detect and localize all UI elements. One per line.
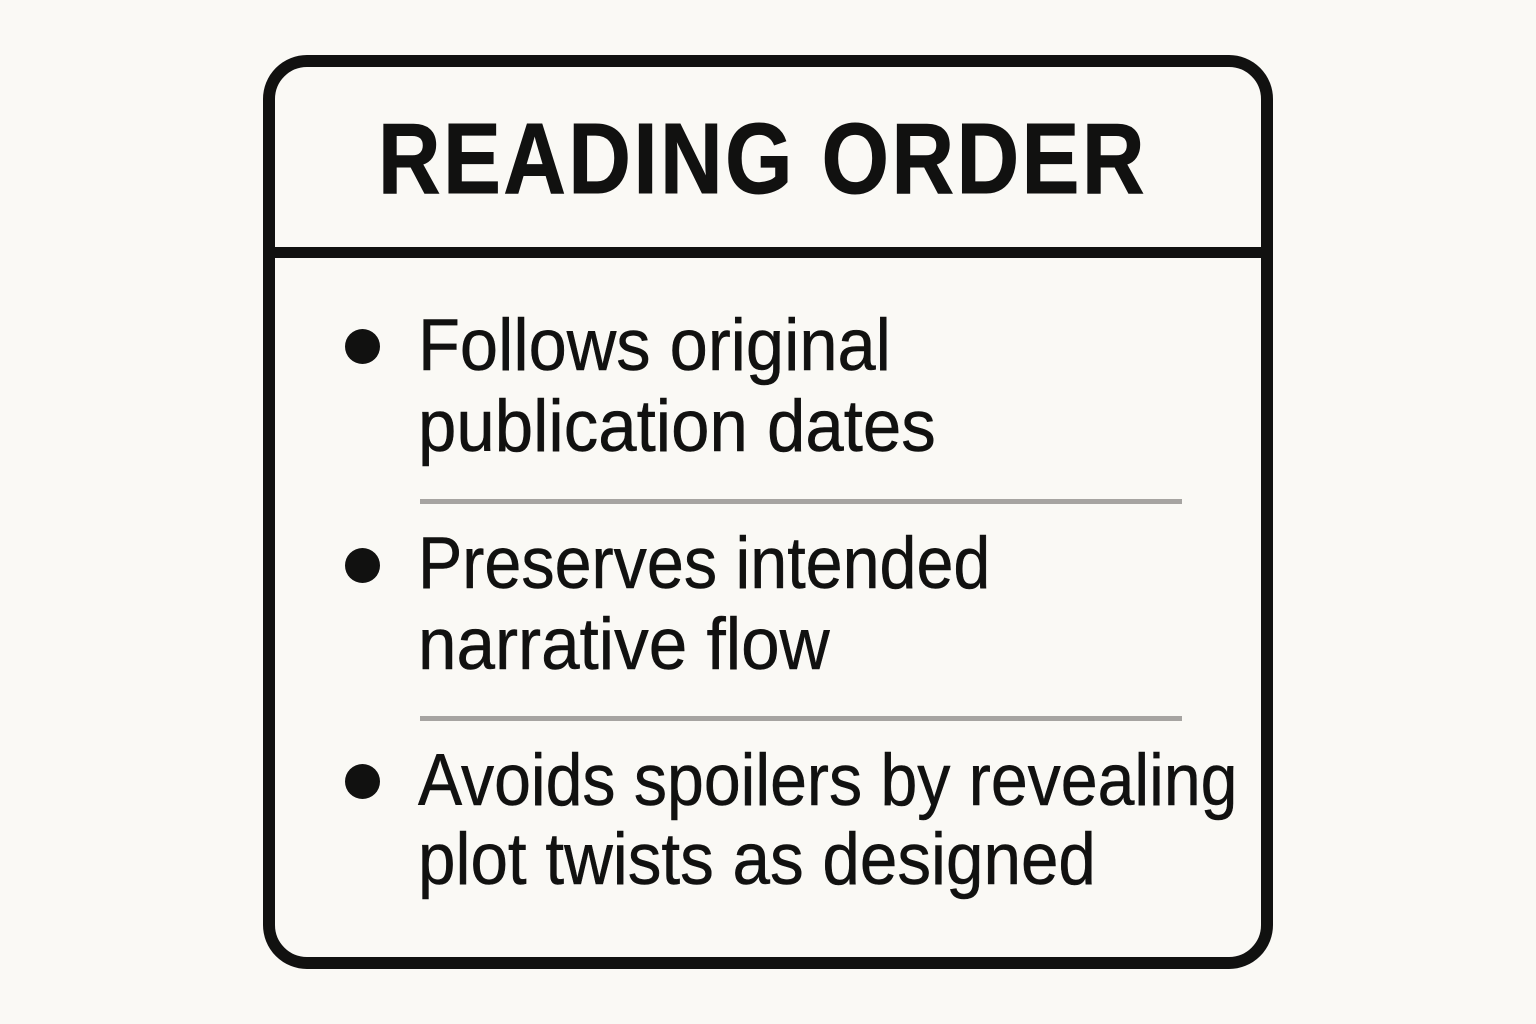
bullet 2 text: Preserves intended — [418, 523, 990, 604]
panel: reading order card — [263, 55, 1273, 969]
bullet 1 dot — [345, 329, 380, 364]
bullet 2 text — [418, 523, 990, 685]
bullet 3 dot — [345, 764, 380, 799]
header divider — [270, 247, 1266, 258]
title: READING ORDER — [378, 103, 1147, 215]
bullet 2 dot — [345, 548, 380, 583]
bullet 1 text: Follows original — [418, 305, 891, 386]
bullet 1 text — [418, 305, 936, 467]
bullet 3 text — [418, 740, 1238, 900]
bullet 3 text: plot twists as designed — [418, 819, 1096, 900]
bullet 3 text: Avoids spoilers by revealing — [418, 740, 1238, 821]
bullet 1 text: publication dates — [418, 386, 936, 467]
bullet 2 text: narrative flow — [418, 604, 830, 685]
